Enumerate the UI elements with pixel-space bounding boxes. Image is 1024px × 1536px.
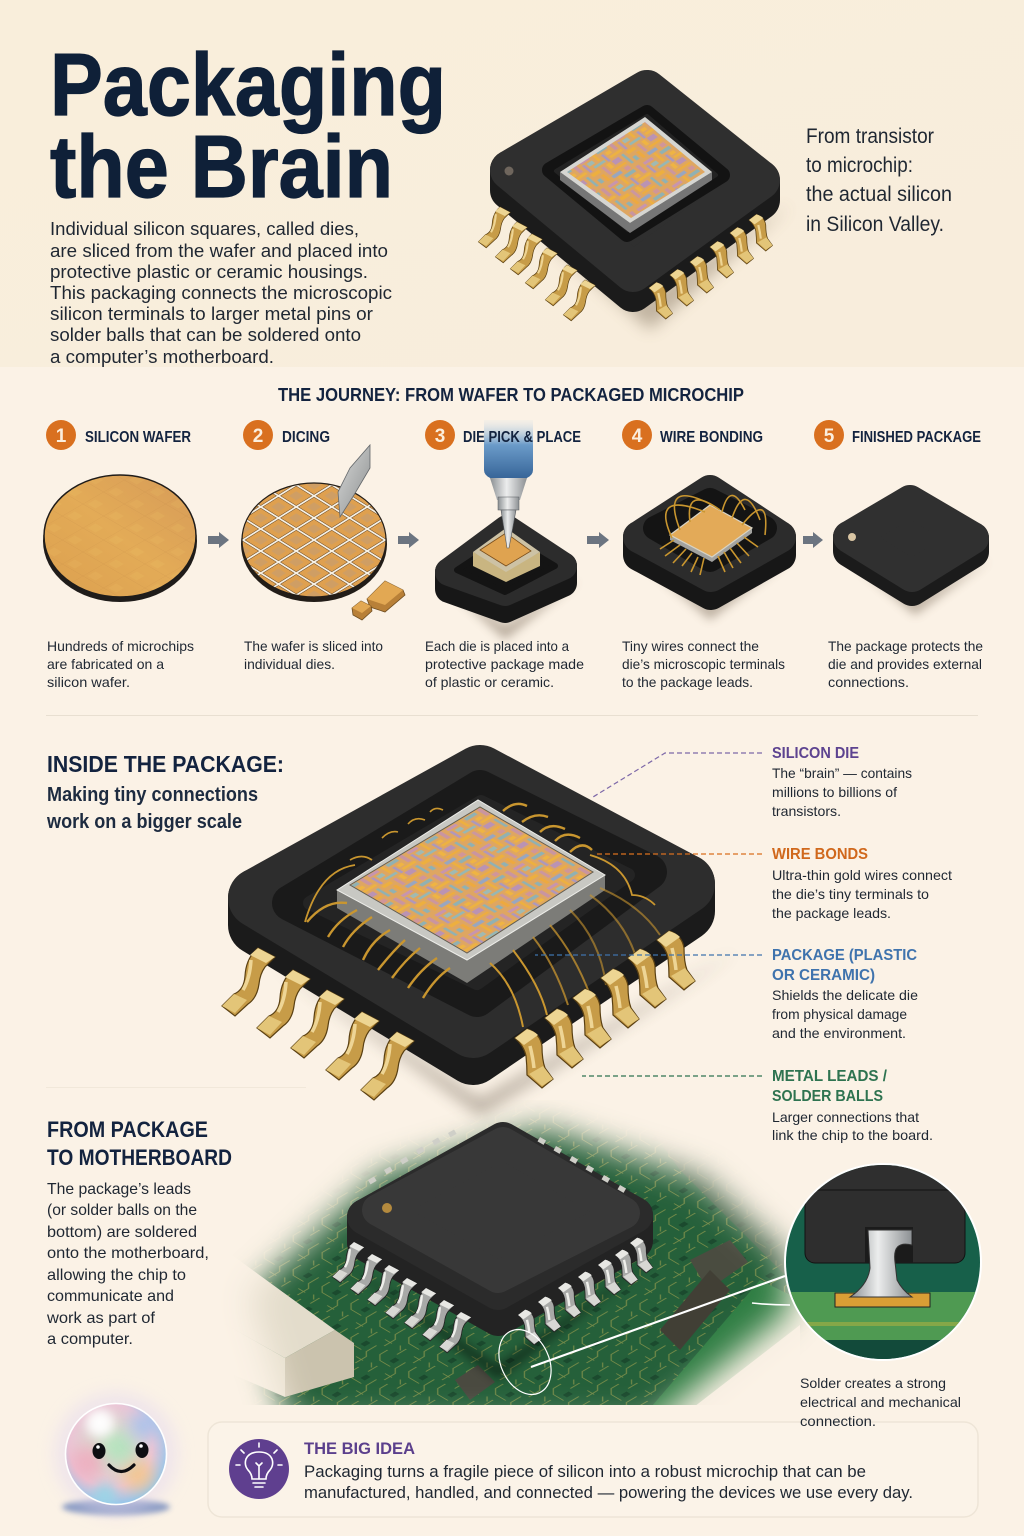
motherboard heading and text: (or solder balls on the (47, 1202, 197, 1219)
step 1: silicon wafer: are fabricated on a (47, 656, 164, 672)
journey heading: THE JOURNEY: FROM WAFER TO PACKAGED MICROCHIP (278, 385, 744, 405)
intro text block (50, 219, 392, 367)
hero caption: the actual silicon (806, 183, 952, 206)
wire bonds (305, 804, 660, 1027)
arrow 1 (208, 532, 229, 548)
solder caption: Solder creates a strong (800, 1375, 946, 1391)
step 4: wire bonding: 4 (632, 426, 643, 447)
step 4: wire bonding (622, 420, 795, 690)
step 5: finished package: The package protects the (828, 638, 983, 654)
step 1: silicon wafer: Hundreds of microchips (47, 638, 194, 654)
big idea panel (208, 1422, 978, 1517)
motherboard heading and text: The package’s leads (47, 1181, 191, 1198)
motherboard heading and text: work as part of (46, 1310, 156, 1327)
step 3: die pick and place: of plastic or ceramic. (425, 674, 554, 690)
callout: silicon die: transistors. (772, 803, 841, 819)
inside heading: Making tiny connections (47, 784, 258, 806)
hero caption: to microchip: (806, 154, 913, 177)
title (50, 35, 446, 216)
intro text block: silicon terminals to larger metal pins or (50, 304, 373, 324)
intro text block: solder balls that can be soldered onto (50, 325, 361, 345)
step 3: die pick and place: DIE PICK & PLACE (463, 429, 581, 446)
title: Packaging (50, 35, 446, 134)
step 4: wire bonding: Tiny wires connect the (622, 638, 759, 654)
inside heading: work on a bigger scale (46, 811, 242, 833)
step 2: dicing: DICING (282, 429, 330, 446)
title: the Brain (50, 117, 393, 216)
callout: package (535, 947, 918, 1041)
step 3: die pick and place: Each die is placed into a (425, 638, 569, 654)
step 1: silicon wafer: 1 (56, 426, 67, 447)
inside heading: INSIDE THE PACKAGE: (47, 751, 284, 777)
step 4: wire bonding: WIRE BONDING (660, 429, 763, 446)
callout: silicon die: The “brain” — contains (772, 765, 912, 781)
intro text block: Individual silicon squares, called dies, (50, 219, 359, 239)
step 2: dicing: The wafer is sliced into (244, 638, 383, 654)
step 5: finished package (814, 420, 990, 690)
arrow 4 (803, 532, 823, 548)
step 2: dicing: 2 (253, 426, 263, 447)
step 1: silicon wafer (43, 420, 197, 690)
arrow 3 (587, 532, 609, 548)
step 3: die pick and place: 3 (435, 426, 445, 447)
motherboard heading and text: bottom) are soldered (47, 1224, 197, 1241)
intro text block: are sliced from the wafer and placed into (50, 241, 388, 261)
step 4: wire bonding: to the package leads. (622, 674, 753, 690)
mascot (54, 1392, 178, 1516)
callout: metal leads: link the chip to the board. (772, 1127, 933, 1143)
motherboard heading and text: communicate and (47, 1288, 174, 1305)
callout: wire bonds: WIRE BONDS (772, 846, 868, 863)
motherboard heading and text (46, 1117, 232, 1348)
step 5: finished package: 5 (824, 426, 835, 447)
hero caption (806, 125, 952, 236)
callout: silicon die: SILICON DIE (772, 745, 859, 762)
callout: silicon die (593, 745, 912, 819)
callout: wire bonds: the package leads. (772, 905, 891, 921)
gold leads (222, 931, 695, 1100)
motherboard heading and text: onto the motherboard, (47, 1245, 209, 1262)
magnifier: solder joint detail (780, 1160, 990, 1365)
intro text block: protective plastic or ceramic housings. (50, 262, 368, 282)
hero chip illustration (478, 90, 790, 330)
step 3: die pick and place (425, 420, 584, 690)
step 4: wire bonding: die’s microscopic terminals (622, 656, 785, 672)
inside heading (46, 751, 284, 833)
motherboard heading and text: a computer. (47, 1331, 133, 1348)
callout: metal leads (582, 1068, 933, 1143)
motherboard heading and text: FROM PACKAGE (47, 1117, 208, 1142)
step 2: dicing (241, 420, 405, 672)
step 1: silicon wafer: silicon wafer. (47, 674, 130, 690)
callout: package: PACKAGE (PLASTIC (772, 947, 917, 964)
callout: package: from physical damage (772, 1006, 907, 1022)
magnifier pointer lines (489, 1276, 790, 1403)
motherboard illustration (244, 1104, 806, 1405)
callout: silicon die: millions to billions of (772, 784, 897, 800)
intro text block: a computer’s motherboard. (50, 347, 274, 367)
callout: metal leads: SOLDER BALLS (772, 1088, 883, 1105)
icon: lightbulb (229, 1439, 289, 1499)
arrow 2 (398, 532, 419, 548)
header band background (0, 0, 1024, 367)
callout: wire bonds: the die’s tiny terminals to (772, 886, 929, 902)
step 1: silicon wafer: SILICON WAFER (85, 429, 191, 446)
big idea panel: Packaging turns a fragile piece of silicon into a robust microchip that can be (304, 1462, 866, 1481)
packaged chip on board (332, 1130, 665, 1380)
step 2: dicing: individual dies. (244, 656, 335, 672)
hero caption: in Silicon Valley. (806, 213, 944, 236)
silicon die (337, 800, 605, 983)
callout: wire bonds (595, 846, 952, 921)
solder caption (800, 1375, 961, 1429)
motherboard heading and text: allowing the chip to (47, 1267, 186, 1284)
callout: package: OR CERAMIC) (772, 967, 875, 984)
callout: package: and the environment. (772, 1025, 906, 1041)
solder caption: electrical and mechanical (800, 1394, 961, 1410)
step 5: finished package: FINISHED PACKAGE (852, 429, 981, 446)
connector block (230, 1265, 354, 1397)
solder caption: connection. (800, 1413, 876, 1429)
step 5: finished package: die and provides external (828, 656, 982, 672)
callout: metal leads: METAL LEADS / (772, 1068, 888, 1085)
step 3: die pick and place: protective package made (425, 656, 584, 672)
big idea panel: manufactured, handled, and connected — powering the devices we use every day. (304, 1483, 913, 1502)
main chip illustration (222, 775, 740, 1115)
callout: package: Shields the delicate die (772, 987, 918, 1003)
step 5: finished package: connections. (828, 674, 909, 690)
big idea panel: THE BIG IDEA (304, 1439, 415, 1458)
motherboard heading and text: TO MOTHERBOARD (47, 1145, 232, 1170)
callout: wire bonds: Ultra-thin gold wires connect (772, 867, 952, 883)
intro text block: This packaging connects the microscopic (50, 283, 392, 303)
callout: metal leads: Larger connections that (772, 1109, 919, 1125)
hero caption: From transistor (806, 125, 934, 148)
